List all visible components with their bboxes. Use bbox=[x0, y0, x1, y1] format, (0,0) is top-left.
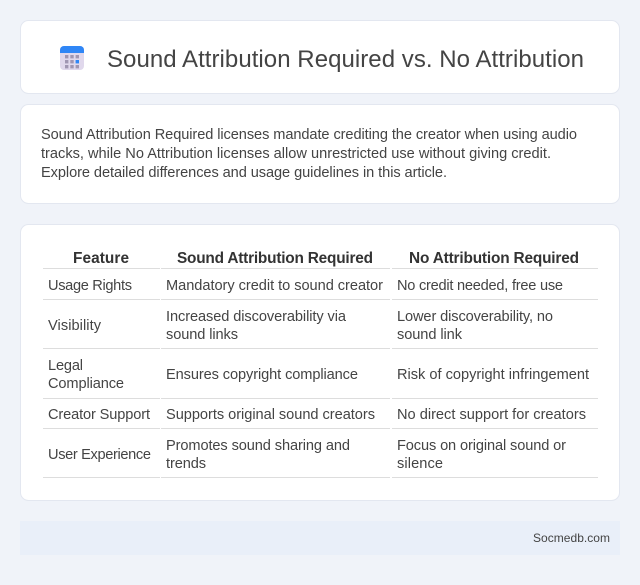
row: legal compliance: Ensures copyright compliance bbox=[166, 367, 358, 383]
row: usage rights: No credit needed, free use bbox=[397, 278, 563, 294]
table header: No Attribution Required bbox=[409, 250, 579, 267]
panel: comparison table bbox=[20, 224, 620, 500]
row: visibility bbox=[48, 309, 553, 343]
title: Sound Attribution Required vs. No Attribution bbox=[107, 46, 584, 73]
row: user experience: Promotes sound sharing and bbox=[166, 438, 350, 454]
row: creator support: No direct support for creators bbox=[397, 407, 586, 423]
row: creator support bbox=[48, 407, 586, 423]
row: legal compliance bbox=[48, 358, 589, 392]
icon: calendar bbox=[60, 46, 84, 70]
row: user experience: trends bbox=[166, 456, 206, 472]
row: usage rights: Usage Rights bbox=[48, 278, 132, 294]
table header bbox=[73, 250, 579, 267]
panel: intro bbox=[20, 104, 620, 204]
row: visibility: sound links bbox=[166, 327, 238, 343]
row: usage rights: Mandatory credit to sound creator bbox=[166, 278, 383, 294]
intro text: Explore detailed differences and usage guidelines in this article. bbox=[41, 165, 447, 181]
intro text bbox=[41, 127, 577, 181]
row: usage rights bbox=[48, 278, 563, 294]
row: visibility: Increased discoverability via bbox=[166, 309, 347, 325]
table header: Sound Attribution Required bbox=[177, 250, 373, 267]
row: creator support: Supports original sound creators bbox=[166, 407, 375, 423]
row: user experience: Focus on original sound or bbox=[397, 438, 566, 454]
footer bar bbox=[20, 521, 620, 555]
row: visibility: Lower discoverability, no bbox=[397, 309, 553, 325]
intro text: Sound Attribution Required licenses mandate crediting the creator when using audio bbox=[41, 127, 577, 143]
row: user experience bbox=[48, 438, 566, 472]
row: legal compliance: Risk of copyright infringement bbox=[397, 367, 589, 383]
row: user experience: User Experience bbox=[48, 447, 151, 463]
row: visibility: sound link bbox=[397, 327, 463, 343]
panel: title card bbox=[20, 20, 620, 94]
table header: Feature bbox=[73, 250, 129, 267]
row: visibility: Visibility bbox=[48, 318, 102, 334]
intro text: tracks, while No Attribution licenses allow unrestricted use without giving credit. bbox=[41, 146, 551, 162]
row: creator support: Creator Support bbox=[48, 407, 150, 423]
row: legal compliance: Legal bbox=[48, 358, 83, 374]
footer text: Socmedb.com bbox=[533, 531, 610, 545]
row: user experience: silence bbox=[397, 456, 443, 472]
row: legal compliance: Compliance bbox=[48, 376, 124, 392]
